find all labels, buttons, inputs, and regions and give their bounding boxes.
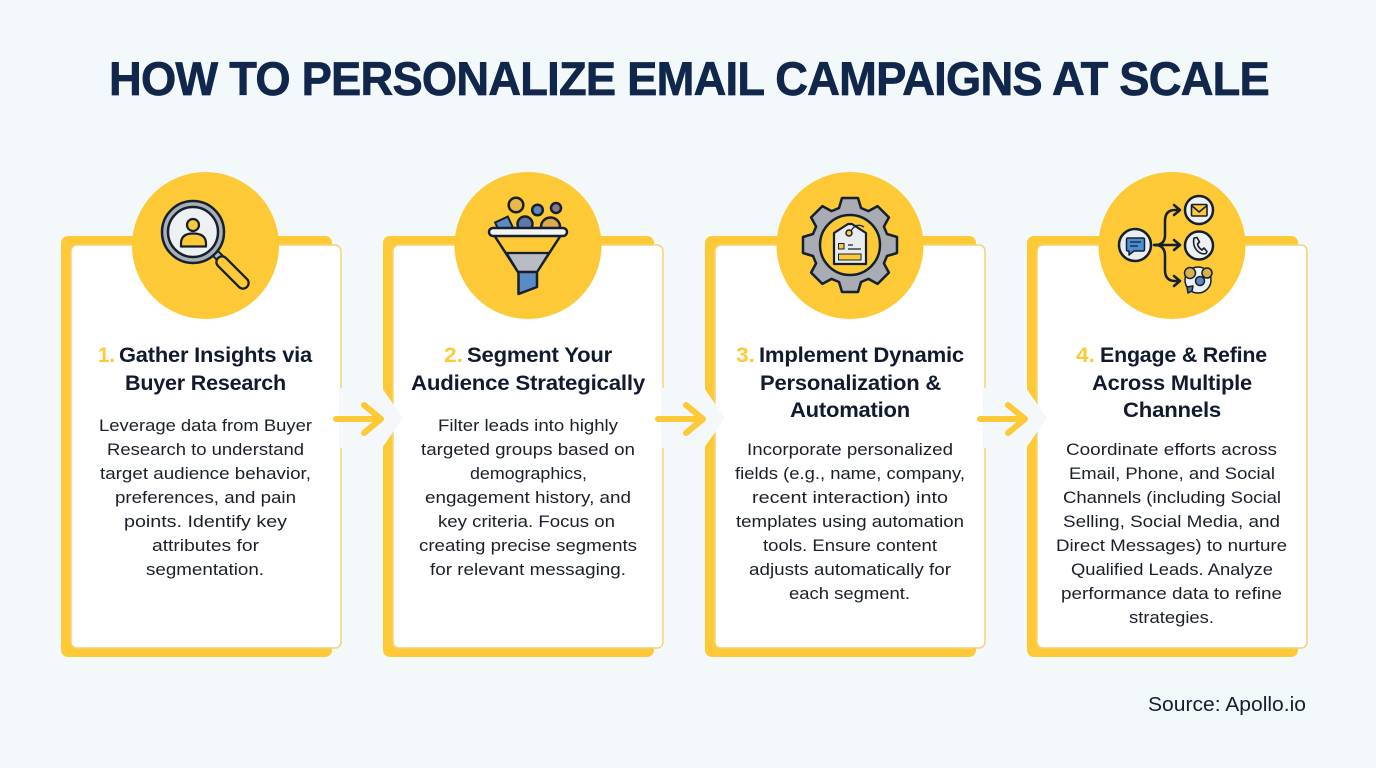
heading: step 3: Implement Dynamic bbox=[759, 344, 965, 367]
icon: gear with tag bbox=[776, 172, 924, 319]
source note: Source: Apollo.io bbox=[1148, 694, 1306, 716]
text: step 3 description bbox=[735, 440, 965, 603]
heading: step 1: Buyer Research bbox=[125, 372, 286, 395]
heading: step 4: 4. bbox=[1076, 344, 1095, 367]
panel: step 4 multichannel engagement bbox=[1027, 172, 1307, 657]
heading: step 3: 3. bbox=[736, 344, 755, 367]
text: step 2 description: demographics, bbox=[470, 464, 587, 483]
title: HOW TO PERSONALIZE EMAIL CAMPAIGNS AT SCALE bbox=[109, 53, 1269, 106]
text: step 4 description: Direct Messages) to nurture bbox=[1056, 536, 1287, 555]
heading: step 2: 2. bbox=[444, 344, 463, 367]
text: step 4 description: Email, Phone, and Social bbox=[1069, 464, 1275, 483]
text: step 4 description: performance data to refine bbox=[1061, 584, 1282, 603]
panel: step 2 segment audience bbox=[383, 172, 663, 657]
text: step 2 description: targeted groups based on bbox=[421, 440, 635, 459]
text: step 3 description: adjusts automatically for bbox=[749, 560, 951, 579]
heading: step 4 bbox=[1076, 344, 1267, 422]
icon: magnifying glass over person bbox=[132, 172, 279, 319]
heading: step 2: Segment Your bbox=[467, 344, 612, 367]
arrow: step 3 to step 4 bbox=[980, 388, 1047, 448]
panel: step 1 gather insights bbox=[61, 172, 341, 657]
arrow: step 2 to step 3 bbox=[658, 388, 725, 448]
icon: filter funnel bbox=[454, 172, 602, 319]
icon: chat branching to email, phone and social bbox=[1098, 172, 1246, 319]
text: step 4 description: strategies. bbox=[1129, 608, 1214, 627]
heading: step 1: Gather Insights via bbox=[119, 344, 313, 367]
text: step 1 description: target audience behavior, bbox=[100, 464, 311, 483]
text: step 1 description: Research to understand bbox=[107, 440, 304, 459]
text: step 2 description: for relevant messaging. bbox=[430, 560, 626, 579]
text: step 2 description: engagement history, and bbox=[425, 488, 631, 507]
text: step 4 description: Qualified Leads. Analyze bbox=[1071, 560, 1273, 579]
text: step 2 description: Filter leads into highly bbox=[438, 416, 619, 435]
text: step 1 description: segmentation. bbox=[146, 560, 264, 579]
text: step 3 description: Incorporate personalized bbox=[747, 440, 953, 459]
text: step 4 description: Channels (including Social bbox=[1063, 488, 1281, 507]
heading: step 4: Across Multiple bbox=[1092, 372, 1252, 395]
heading: step 4: Engage & Refine bbox=[1100, 344, 1267, 367]
text: step 3 description: fields (e.g., name, company, bbox=[735, 464, 965, 483]
text: step 1 description: points. Identify key bbox=[124, 512, 288, 531]
text: step 1 description: preferences, and pain bbox=[115, 488, 296, 507]
text: step 4 description bbox=[1056, 440, 1287, 627]
heading: step 2: Audience Strategically bbox=[411, 372, 646, 395]
text: step 1 description: attributes for bbox=[152, 536, 259, 555]
text: step 3 description: tools. Ensure content bbox=[763, 536, 937, 555]
heading: step 1: 1. bbox=[98, 344, 115, 367]
text: step 3 description: recent interaction) into bbox=[752, 488, 948, 507]
text: step 2 description: creating precise segments bbox=[419, 536, 637, 555]
text: step 4 description: Selling, Social Media, and bbox=[1063, 512, 1280, 531]
text: step 2 description bbox=[419, 416, 637, 579]
text: step 3 description: each segment. bbox=[789, 584, 910, 603]
heading: step 1 bbox=[98, 344, 313, 395]
text: step 3 description: templates using automation bbox=[736, 512, 964, 531]
heading: step 3 bbox=[736, 344, 965, 422]
heading: step 3: Personalization & bbox=[760, 372, 941, 395]
text: step 2 description: key criteria. Focus on bbox=[438, 512, 615, 531]
heading: step 2 bbox=[411, 344, 646, 395]
panel: step 3 dynamic personalization bbox=[705, 172, 985, 657]
text: step 1 description: Leverage data from Buyer bbox=[99, 416, 312, 435]
heading: step 3: Automation bbox=[790, 399, 910, 422]
heading: step 4: Channels bbox=[1123, 399, 1221, 422]
text: step 4 description: Coordinate efforts across bbox=[1066, 440, 1277, 459]
text: step 1 description bbox=[99, 416, 312, 579]
arrow: step 1 to step 2 bbox=[336, 388, 403, 448]
